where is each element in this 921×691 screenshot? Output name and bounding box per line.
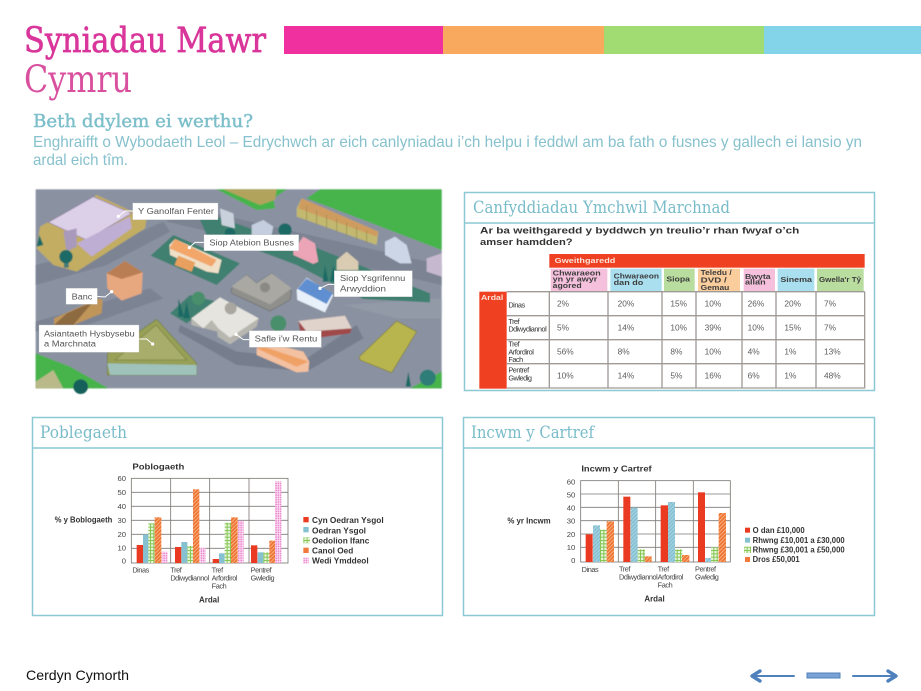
panel heading: Poblegaeth (40, 423, 127, 442)
intro text: ardal eich tîm. (33, 152, 128, 169)
panel: illustrated town map (36, 189, 442, 394)
survey table: Chwaraeon (614, 272, 660, 281)
survey table: Siopa (666, 274, 691, 283)
bar chart: population: 40 (117, 502, 126, 511)
bar chart: population: Ddiwydiannol (170, 574, 210, 583)
legend: Wedi Ymddeol (312, 557, 369, 566)
map label: Asiantaeth Hysbysebu a Marchnata: a Marchnata (44, 340, 97, 349)
survey table: 10% (557, 370, 574, 380)
survey table: Pentref (508, 366, 530, 375)
Siop Atebion Busnes (169, 239, 222, 273)
bar chart: population: 30 (117, 516, 126, 525)
bar chart: household income: 60 (567, 478, 575, 487)
survey table: 14% (618, 322, 635, 332)
bar chart: population: Tref (212, 566, 224, 575)
red block (298, 316, 352, 340)
bar chart: population: Arfordirol (212, 574, 238, 583)
legend: Canol Oed (312, 546, 353, 555)
colour band (284, 26, 921, 54)
bar chart: population: Gwledig (251, 574, 274, 583)
bar chart: population: 10 (117, 544, 126, 553)
survey table: 7% (824, 298, 837, 308)
survey table: 7% (824, 322, 837, 332)
survey table: 10% (670, 322, 688, 332)
arrow: back (752, 671, 794, 681)
map label: Asiantaeth Hysbysebu a Marchnata: Asiantaeth Hysbysebu (44, 329, 135, 338)
map label: Siop Ysgrifennu Arwyddion (318, 271, 412, 297)
title: Cymru: Cymru (24, 58, 132, 101)
bar chart: population (55, 461, 384, 604)
Siop Ysgrifennu (297, 278, 333, 312)
legend: Rhwng £30,001 a £50,000 (753, 545, 845, 554)
bar chart: household income: Tref (658, 565, 670, 574)
bar chart: population: 50 (117, 488, 126, 497)
bar: menu (807, 673, 840, 678)
bar chart: household income: 40 (567, 504, 575, 513)
bar chart: population: % y Boblogaeth (55, 516, 112, 525)
olive building right (359, 321, 417, 373)
survey table: Tref (508, 339, 521, 348)
Y Ganolfan Fenter site (37, 195, 147, 272)
road tones (167, 205, 442, 285)
intro text: Enghraifft o Wybodaeth Leol – Edrychwch ar eich canlyniadau i’ch helpu i feddwl am ba fath o fusnes y gallech ei lansio yn (33, 134, 862, 151)
map label: Y Ganolfan Fenter: Y Ganolfan Fenter (138, 207, 214, 216)
bar chart: population: 60 (117, 474, 126, 483)
survey table: agored (553, 281, 582, 290)
bar chart: population: 0 (122, 557, 126, 566)
survey table: Arfordirol (508, 347, 534, 356)
survey table: 16% (705, 370, 722, 380)
survey table: 13% (824, 346, 841, 356)
survey table: 5% (557, 322, 570, 332)
map label: Y Ganolfan Fenter (117, 203, 218, 220)
survey table: Ar ba weithgaredd y byddwch yn treulio’r rhan fwyaf o’ch (480, 226, 799, 236)
map label: Safle i'w Rentu: Safle i'w Rentu (255, 335, 317, 344)
bar chart: population: Poblogaeth (132, 461, 184, 471)
survey table: allan (745, 278, 766, 287)
bar chart: population: 20 (117, 530, 126, 539)
bar chart: household income: 20 (567, 530, 575, 539)
terraces at top (223, 189, 277, 205)
survey table: 20% (618, 298, 635, 308)
bar chart: population: Ardal (199, 595, 219, 604)
survey table: 48% (824, 370, 841, 380)
bar chart: household income: 10 (567, 543, 575, 552)
bar chart: household income: Fach (658, 581, 673, 590)
survey table: 1% (784, 370, 797, 380)
survey table: Gemau (701, 283, 729, 292)
panel heading: Canfyddiadau Ymchwil Marchnad (473, 198, 730, 217)
survey table: 8% (670, 346, 683, 356)
survey table: 15% (670, 298, 688, 308)
panel: Poblegaeth (32, 418, 442, 616)
survey table: Dinas (508, 300, 526, 309)
legend (744, 526, 845, 564)
survey table: Gweithgaredd (555, 256, 615, 265)
legend: Oedran Ysgol (312, 526, 366, 535)
survey table: 26% (748, 298, 765, 308)
bar chart: household income: 50 (567, 491, 575, 500)
lower orange (257, 342, 309, 372)
panel: Incwm y Cartref (464, 418, 874, 616)
footer label: Cerdyn Cymorth: Cerdyn Cymorth (26, 667, 129, 683)
legend: Rhwng £10,001 a £30,000 (753, 536, 845, 545)
bar chart: household income: Incwm y Cartref (581, 464, 652, 474)
map label: Banc: Banc (72, 292, 92, 301)
survey table (479, 226, 865, 389)
survey table: Bwyta (745, 272, 772, 281)
bar chart: household income: Ardal (644, 594, 665, 603)
bar chart: household income: 30 (567, 517, 575, 526)
survey table: Tref (508, 317, 521, 326)
Safle i'w Rentu (191, 297, 259, 344)
legend: Dros £50,001 (753, 555, 800, 564)
bar chart: household income: Pentref (695, 565, 717, 574)
survey table: Gwella'r Tŷ (819, 275, 862, 284)
survey table: 2% (557, 298, 570, 308)
bar chart: population: Pentref (251, 566, 273, 575)
survey table: 10% (705, 346, 722, 356)
legend (303, 516, 384, 566)
survey table: 15% (784, 322, 802, 332)
survey table: 20% (784, 298, 802, 308)
bar chart: household income: Gwledig (695, 573, 719, 582)
bar chart: household income: % yr Incwm (507, 517, 551, 526)
bar chart: household income: Tref (619, 565, 631, 574)
arrow: next (853, 671, 896, 681)
survey table: 39% (705, 322, 722, 332)
green plots (200, 217, 430, 302)
map label: Safle i'w Rentu (234, 331, 321, 347)
survey table: Sinema (780, 275, 813, 284)
survey table: Ddiwydiannol (508, 324, 547, 333)
bar chart: household income: Dinas (582, 565, 599, 574)
survey table: DVD / (701, 275, 727, 284)
bar chart: household income: Ddiwydiannol (619, 573, 658, 582)
survey table: 10% (705, 298, 722, 308)
legend: Cyn Oedran Ysgol (312, 516, 384, 525)
title: Syniadau Mawr: Syniadau Mawr (24, 21, 266, 61)
survey table: Teledu / (701, 268, 732, 277)
map label: Siop Atebion Busnes (188, 235, 299, 251)
map label: Siop Ysgrifennu Arwyddion: Siop Ysgrifennu (340, 274, 405, 283)
survey table: 56% (557, 346, 574, 356)
legend: O dan £10,000 (753, 526, 805, 535)
survey table: Chwaraeon (553, 268, 601, 277)
heading: Beth ddylem ei werthu?: Beth ddylem ei werthu? (33, 111, 253, 132)
survey table: 14% (618, 370, 635, 380)
survey table: 6% (748, 370, 760, 380)
map label: Siop Atebion Busnes: Siop Atebion Busnes (209, 238, 294, 247)
bar chart: population: Tref (170, 566, 183, 575)
legend: Oedolion Ifanc (312, 536, 370, 545)
map label: Asiantaeth Hysbysebu a Marchnata (39, 325, 154, 352)
survey table: dan do (614, 278, 644, 287)
Banc (107, 261, 143, 301)
Asiantaeth building (107, 319, 197, 375)
panel heading: Incwm y Cartref (471, 423, 596, 442)
survey table: 10% (748, 322, 765, 332)
survey table: yn yr awyr (553, 275, 598, 284)
survey table: Fach (508, 355, 523, 364)
bar chart: population: Dinas (132, 566, 150, 575)
survey table: 1% (784, 346, 797, 356)
survey table: amser hamdden? (480, 237, 573, 247)
survey table: Gwledig (508, 373, 532, 382)
survey table: 5% (670, 370, 683, 380)
survey table: 8% (618, 346, 630, 356)
map label: Banc (66, 288, 113, 304)
survey table: Ardal (481, 293, 503, 302)
background houses (220, 208, 235, 228)
panel: Canfyddiadau Ymchwil Marchnad (464, 192, 874, 390)
survey table: 4% (748, 346, 760, 356)
bar chart: household income: 0 (571, 556, 575, 565)
bar chart: household income: Arfordirol (658, 573, 684, 582)
bar chart: population: Fach (212, 582, 227, 591)
map label: Siop Ysgrifennu Arwyddion: Arwyddion (340, 284, 386, 293)
centre grey (231, 273, 292, 311)
bar chart: household income (507, 464, 845, 603)
